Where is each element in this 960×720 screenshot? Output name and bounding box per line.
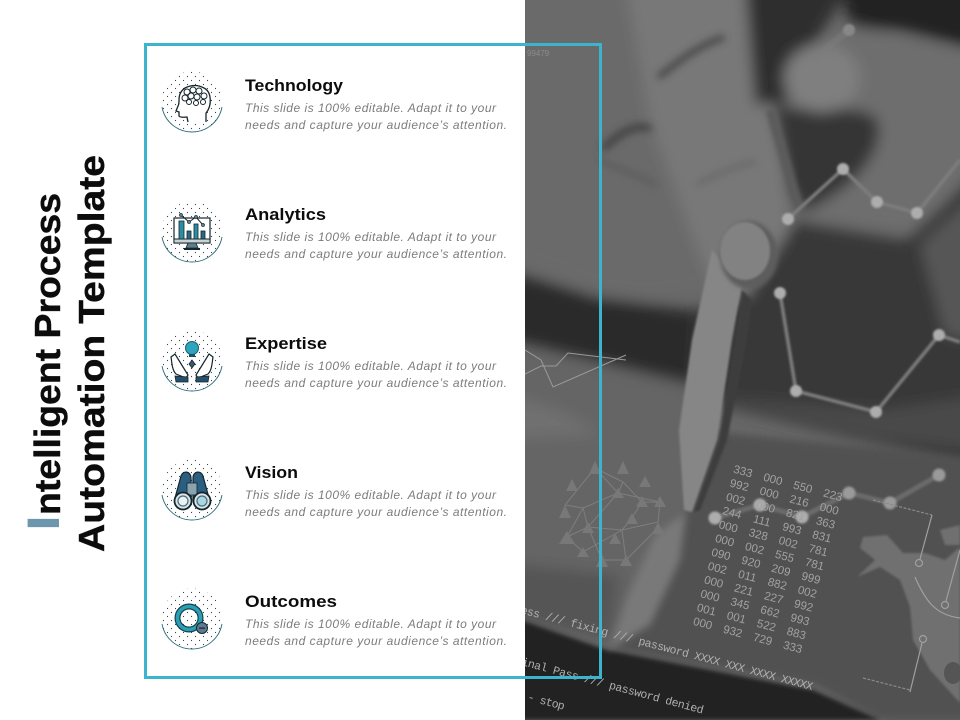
scrolling number table: 216 [788, 494, 810, 510]
scrolling number table: 333 [732, 464, 754, 480]
scrolling number table: 002 [706, 561, 728, 577]
icon: progress ring with minus [162, 588, 222, 650]
scrolling number table: 992 [728, 478, 750, 494]
dark foreground band [525, 618, 880, 720]
title: ntelligent Process [27, 193, 68, 515]
scrolling number table: 550 [792, 480, 814, 496]
item: Vision: needs and capture your audience’s attention. [245, 505, 507, 519]
stylus body [679, 250, 742, 512]
heading: Vision: Vision [245, 463, 298, 482]
heading: Technology: Technology [245, 76, 344, 95]
scrolling number table: 221 [733, 582, 754, 599]
scrolling number table: 111 [752, 513, 772, 530]
scrolling number table: 781 [807, 543, 829, 559]
molecule network lines [715, 30, 960, 518]
scrolling number table: 000 [699, 588, 721, 605]
scrolling number table: 831 [811, 529, 833, 546]
scrolling number table: 002 [744, 541, 765, 557]
fingertip [720, 221, 778, 289]
scrolling number table [692, 464, 843, 656]
scrolling number table: 882 [766, 576, 788, 593]
scrolling number table: 000 [703, 574, 724, 591]
scrolling number table: 000 [758, 486, 780, 502]
scrolling number table: 555 [774, 549, 795, 565]
title: Automation Template [71, 155, 112, 552]
scrolling number table: 522 [755, 618, 777, 634]
description: Expertise: This slide is 100% editable. Adapt it to your [245, 359, 497, 373]
scrolling number table: 011 [737, 569, 758, 585]
item: Outcomes [162, 588, 507, 650]
scrolling number table: 999 [800, 571, 822, 587]
stylus shaft behind finger [770, 110, 800, 210]
scrolling number table: 821 [785, 507, 806, 524]
map pins and leader lines [863, 500, 960, 692]
stylus reflection [608, 512, 686, 650]
terminal text lines: ess /// fixing /// password XXXX XXX XXXX XXXXX [519, 604, 814, 694]
heading: Expertise: Expertise [245, 334, 327, 353]
scrolling number table: 781 [804, 557, 825, 573]
scrolling number table: 333 [782, 640, 803, 656]
scrolling number table: 000 [762, 472, 784, 488]
tablet surface tone [607, 432, 960, 720]
scrolling number table: 883 [785, 626, 807, 642]
icon: binoculars [162, 460, 222, 520]
title [20, 155, 112, 552]
item: Expertise: needs and capture your audience’s attention. [245, 376, 507, 390]
scrolling number table: 729 [752, 632, 773, 648]
scrolling number table: 000 [692, 616, 713, 632]
scrolling number table: 328 [747, 527, 769, 544]
scrolling number table: 993 [781, 521, 803, 538]
description: Outcomes: This slide is 100% editable. Adapt it to your [245, 617, 497, 631]
item: Technology [162, 72, 507, 132]
heading: Analytics: Analytics [245, 205, 326, 224]
description: Vision: This slide is 100% editable. Adapt it to your [245, 488, 497, 502]
teal frame [146, 44, 600, 678]
scrolling number table: 090 [710, 547, 732, 563]
scrolling number table: 223 [822, 488, 843, 504]
thin line chart [525, 350, 626, 387]
scrolling number table: 001 [725, 610, 747, 627]
terminal text lines: - stop [526, 691, 566, 714]
scrolling number table: 002 [725, 491, 746, 508]
finger creases [602, 32, 744, 173]
small faint code label: 99479 [527, 49, 550, 58]
molecule network nodes [708, 24, 946, 524]
map of North America [857, 535, 960, 703]
terminal text lines: inal Pass /// password denied [520, 656, 705, 718]
photo: hand holding stylus over digital tablet [480, 0, 960, 720]
scrolling number table: 227 [763, 590, 784, 607]
map lakes and islands [940, 525, 960, 684]
scrolling number table: 992 [793, 598, 814, 615]
title: I [20, 517, 68, 529]
item: Expertise [162, 330, 507, 392]
scrolling number table: 662 [759, 604, 781, 621]
scrolling number table: 920 [740, 555, 762, 571]
description: Analytics: This slide is 100% editable. Adapt it to your [245, 230, 497, 244]
item: Vision [162, 460, 507, 520]
scrolling number table: 000 [717, 519, 739, 536]
scrolling number table: 002 [796, 584, 818, 601]
scrolling number table: 345 [729, 596, 751, 613]
icon: brain in head [162, 72, 222, 132]
description: Technology: This slide is 100% editable. Adapt it to your [245, 101, 497, 115]
item: Outcomes: needs and capture your audience’s attention. [245, 634, 507, 648]
heading: Outcomes: Outcomes [245, 592, 337, 611]
item: Technology: needs and capture your audience’s attention. [245, 118, 507, 132]
scrolling number table: 244 [721, 505, 743, 522]
scrolling number table: 993 [789, 612, 811, 629]
scrolling number table: 932 [722, 624, 743, 640]
scrolling number table: 209 [770, 563, 792, 579]
item: Analytics: needs and capture your audience’s attention. [245, 247, 507, 261]
icon: hands with light bulb [162, 330, 222, 392]
icon: analytics monitor [162, 202, 222, 262]
scrolling number table: 363 [815, 515, 836, 532]
item: Analytics [162, 202, 507, 262]
scrolling number table: 000 [755, 499, 776, 516]
scrolling number table: 002 [777, 535, 799, 551]
scrolling number table: 000 [714, 533, 735, 549]
faint network graphic [565, 468, 660, 560]
scrolling number table: 001 [695, 602, 717, 619]
scrolling number table: 000 [818, 501, 840, 518]
